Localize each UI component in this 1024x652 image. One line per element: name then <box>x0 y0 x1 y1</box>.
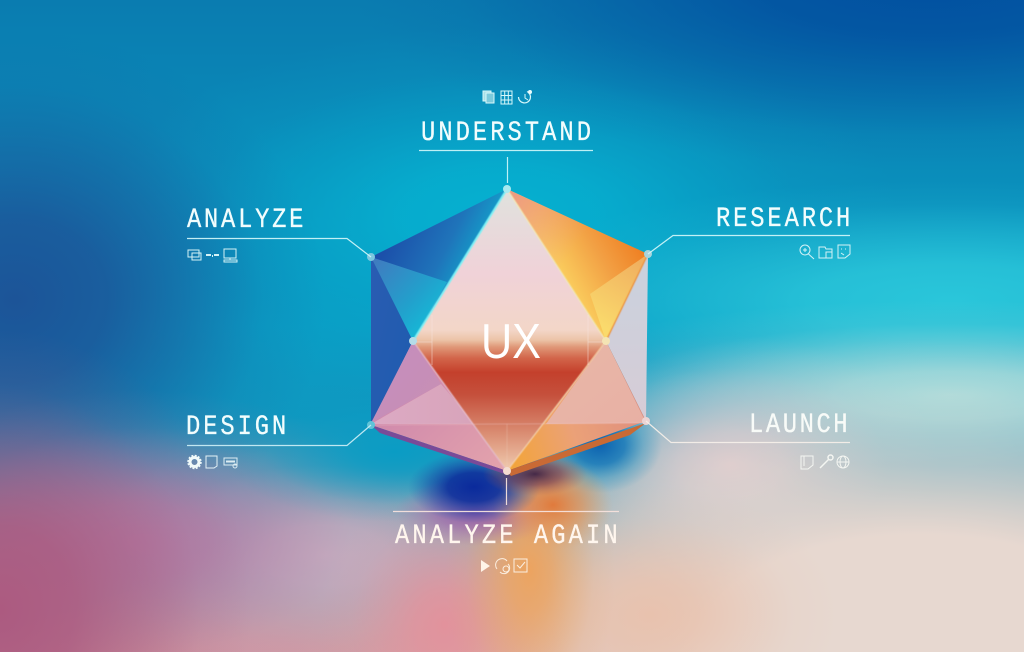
icon: documents <box>483 91 494 103</box>
connector: research <box>648 236 850 254</box>
icons: design <box>188 456 237 468</box>
icons: analyze <box>188 249 237 262</box>
face: lower left band <box>371 384 475 424</box>
icon: windows <box>188 250 201 260</box>
face: left <box>371 257 413 425</box>
face: central diamond <box>413 189 606 471</box>
icon: table <box>501 91 512 104</box>
icon: sticky note <box>838 245 850 258</box>
icon: tablet <box>206 456 217 468</box>
heading: understand: UNDERSTAND <box>421 116 591 149</box>
icons: understand <box>483 90 532 104</box>
icon: play <box>481 560 490 572</box>
icon: refresh <box>496 559 510 574</box>
face: lower left <box>371 341 507 471</box>
icon: flow <box>206 255 219 256</box>
icons: launch <box>801 455 849 469</box>
connector: analyze <box>187 238 371 257</box>
icon: gear <box>188 456 201 468</box>
face: lower right band <box>546 341 646 424</box>
heading: analyze again: ANALYZE AGAIN <box>395 519 618 552</box>
face: upper left inner <box>371 257 447 341</box>
face: right <box>606 254 648 421</box>
face: upper right inner <box>590 254 648 341</box>
icon: settings window <box>224 458 237 468</box>
face: upper right salmon tint <box>507 189 648 341</box>
connector: understand <box>419 150 593 183</box>
heading: launch: LAUNCH <box>749 408 848 441</box>
icon: checkbox <box>514 559 527 572</box>
connector: analyze again <box>393 478 619 512</box>
node dots <box>367 185 652 475</box>
icon: globe <box>837 456 849 468</box>
heading: design: DESIGN <box>186 410 286 443</box>
icon: folder <box>819 247 832 258</box>
face: lower right <box>507 341 646 471</box>
connector: design <box>187 425 371 446</box>
connectors <box>187 150 850 512</box>
icons: research <box>800 245 850 259</box>
icon: history clock <box>518 90 532 103</box>
icon: magnifier <box>800 245 814 259</box>
face: upper left <box>371 189 507 341</box>
inner bracket lines <box>413 315 606 365</box>
icosahedron <box>367 185 652 476</box>
face: bottom rim <box>507 423 646 476</box>
icosahedron shadow <box>395 397 662 551</box>
heading: research: RESEARCH <box>716 202 850 235</box>
icons: analyze again <box>481 559 527 574</box>
center label UX: UX <box>481 315 541 369</box>
face: upper right <box>507 189 648 341</box>
icon: clipboard <box>801 456 813 469</box>
icon: wrench <box>820 455 833 468</box>
icon: computer <box>224 249 237 262</box>
face: lower left top <box>371 341 441 423</box>
edges <box>371 189 648 471</box>
connector: launch <box>646 421 850 442</box>
heading: analyze: ANALYZE <box>187 203 303 236</box>
